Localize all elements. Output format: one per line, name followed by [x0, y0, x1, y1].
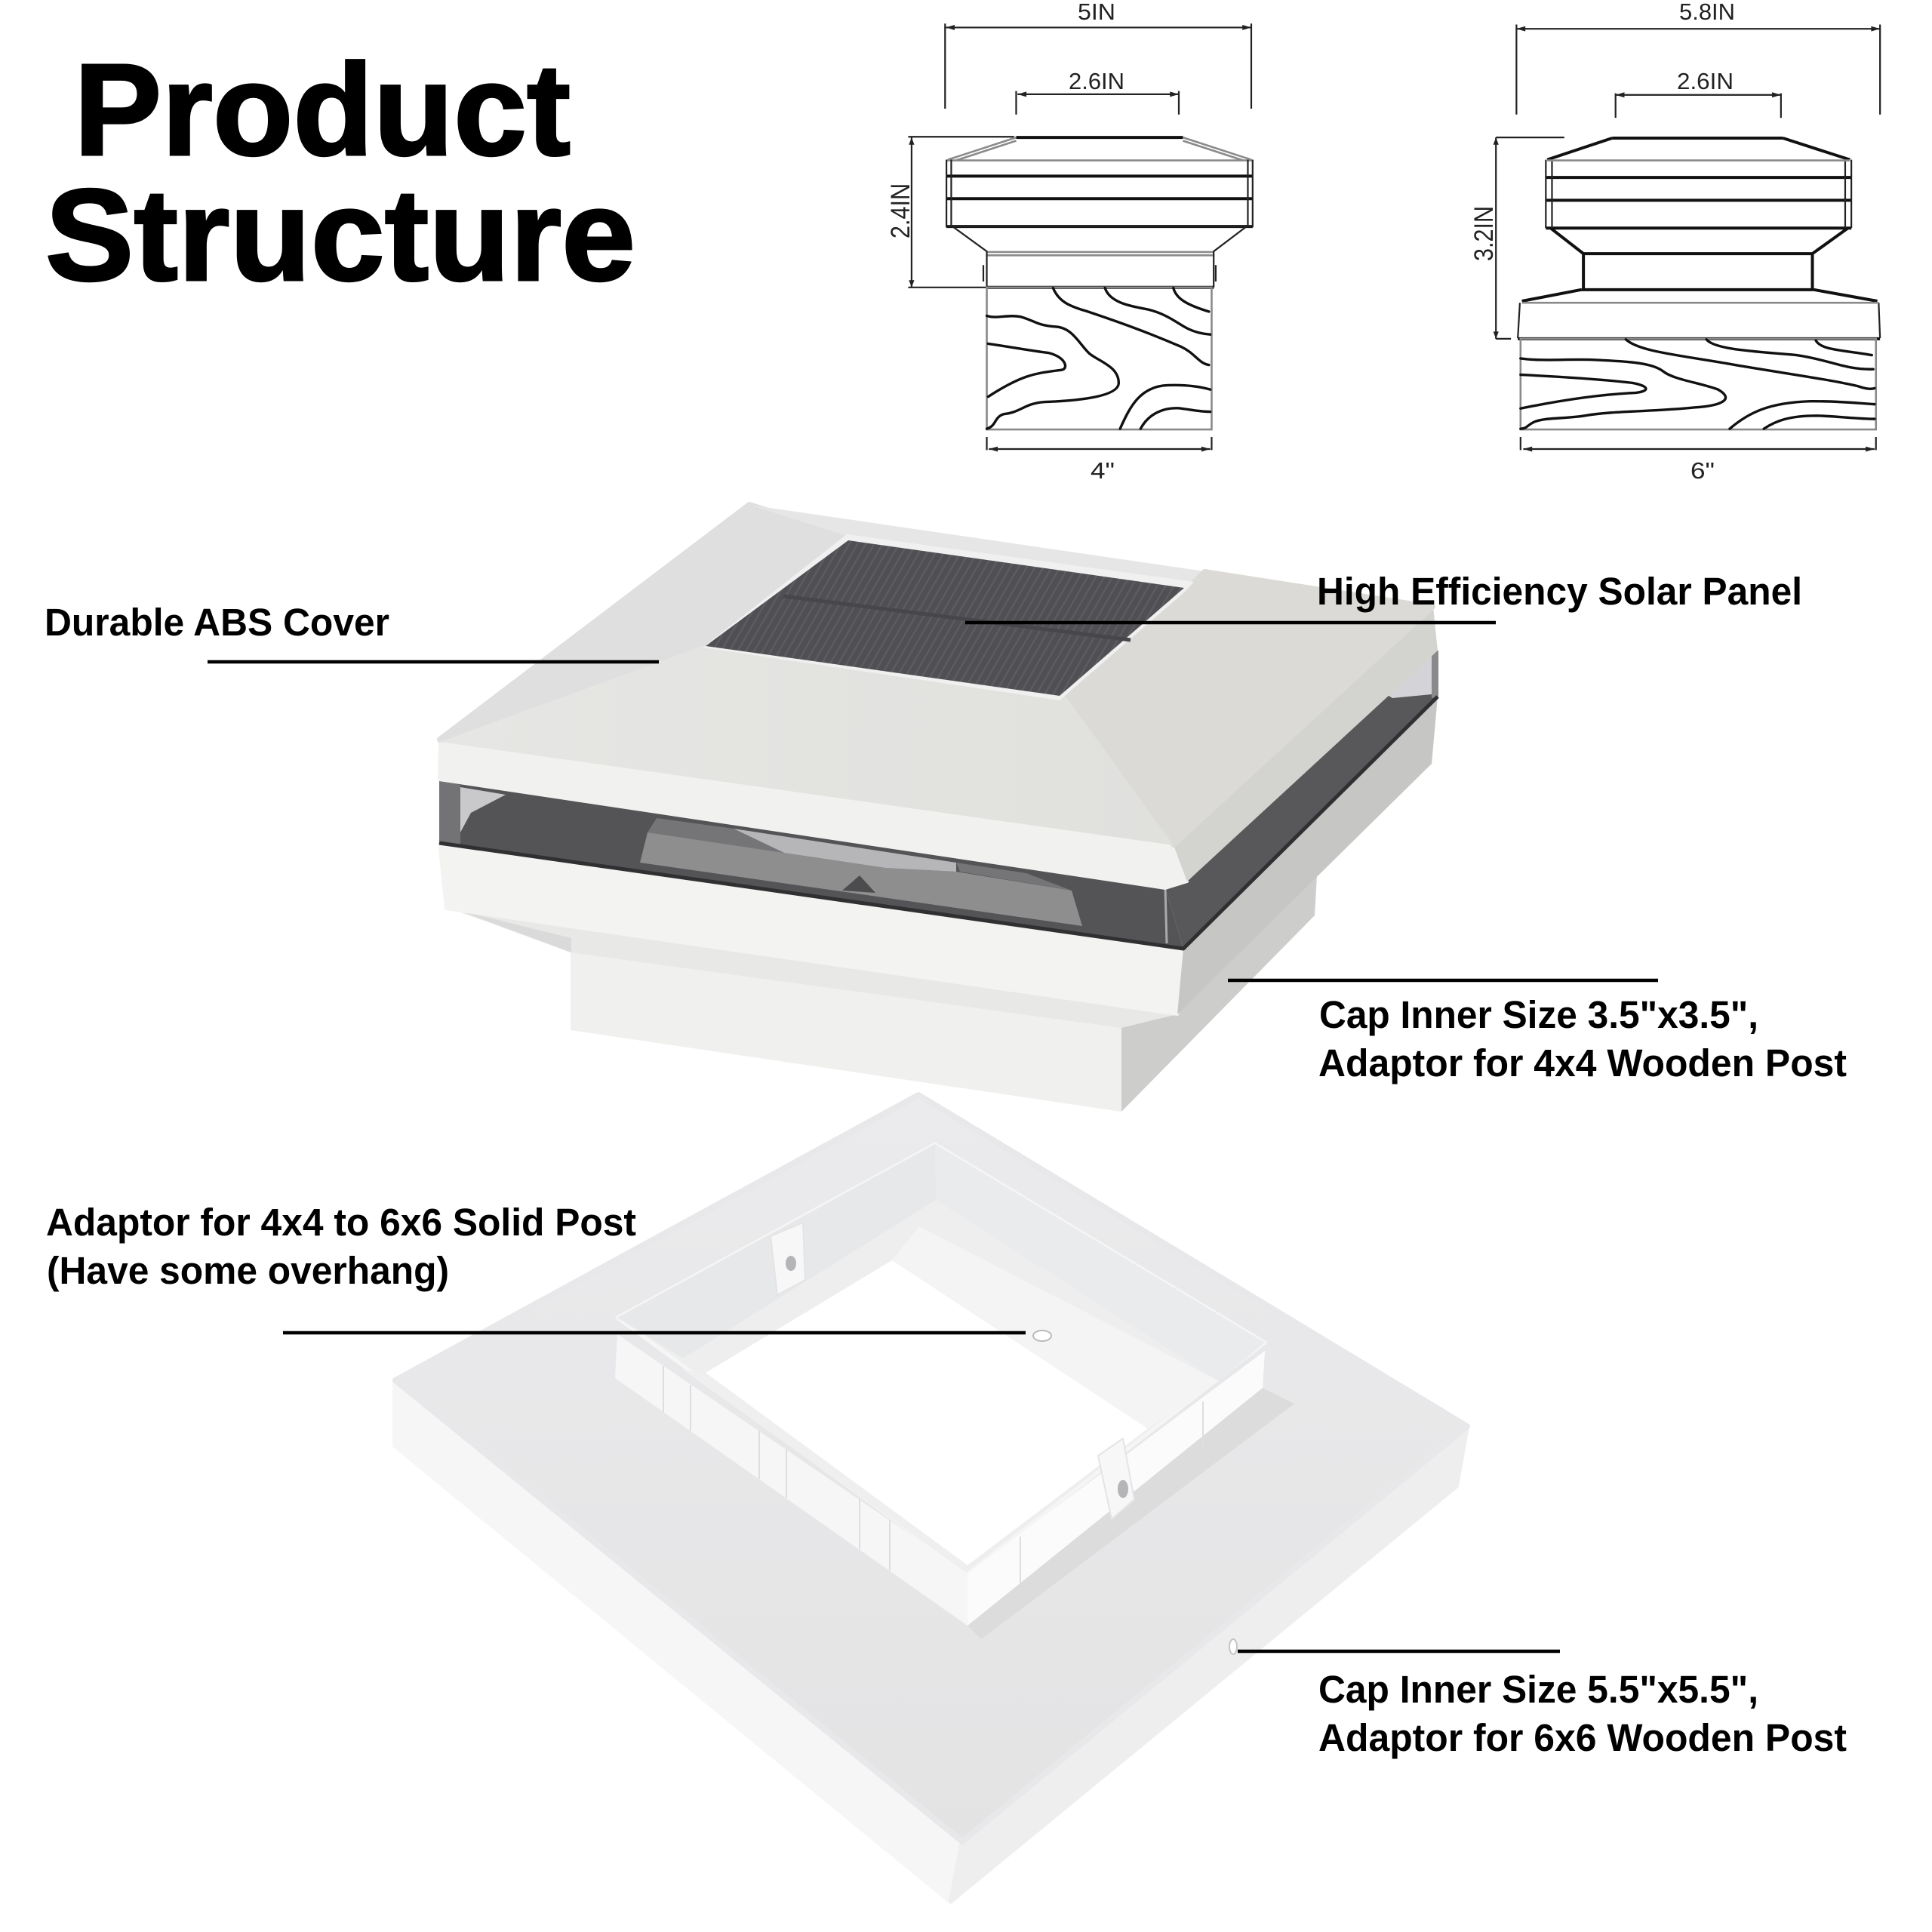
clip tab left	[771, 1223, 805, 1295]
dimension labels: 2.6IN	[1677, 68, 1734, 94]
title	[45, 36, 635, 308]
dimension labels	[886, 0, 1735, 484]
collar front wall	[615, 1334, 968, 1626]
wood post	[1521, 339, 1876, 429]
callout: high efficiency solar panel: High Efficiency Solar Panel	[1317, 570, 1802, 613]
dimension labels: 4"	[1091, 457, 1115, 484]
callout: 6x6 cap inner size	[1238, 1651, 1847, 1759]
arrowheads	[1494, 26, 1880, 452]
panel surround	[703, 534, 1194, 700]
callout: 4x4 to 6x6 adaptor: Adaptor for 4x4 to 6x6 Solid Post	[46, 1201, 636, 1244]
callout: durable ABS cover: Durable ABS Cover	[45, 601, 389, 644]
callout: 6x6 cap inner size: Adaptor for 6x6 Wooden Post	[1318, 1716, 1847, 1759]
collar interior	[617, 1144, 1265, 1574]
callout: 4x4 to 6x6 adaptor	[46, 1201, 1026, 1333]
callout: 4x4 to 6x6 adaptor: (Have some overhang)	[47, 1249, 449, 1292]
adaptor right side	[951, 1426, 1467, 1901]
dimension diagram: 4x4 post	[908, 23, 1253, 452]
photo: 6x6 adaptor	[395, 1095, 1467, 1901]
wood grain	[1521, 340, 1875, 429]
callout: 4x4 cap inner size: Adaptor for 4x4 Wooden Post	[1318, 1041, 1847, 1084]
adaptor top face	[395, 1095, 1467, 1841]
screw hole side	[1229, 1639, 1237, 1654]
arrowheads	[909, 25, 1251, 452]
under slope	[453, 909, 1177, 1028]
dimension diagram: 6x6 post	[1494, 25, 1880, 452]
photo: solar post cap	[439, 505, 1438, 1112]
callout: 6x6 cap inner size: Cap Inner Size 5.5"x5.5",	[1318, 1668, 1758, 1711]
cover slopes	[440, 505, 1433, 845]
cap outline	[946, 137, 1253, 288]
collar right wall	[968, 1351, 1265, 1626]
base sleeve	[571, 875, 1317, 1112]
wood grain	[987, 288, 1211, 429]
cap outline	[1518, 138, 1880, 339]
dimension lines	[908, 23, 1251, 450]
clip tab right	[1098, 1438, 1134, 1519]
dimension labels: 3.2IN	[1469, 206, 1499, 261]
solar panel	[706, 540, 1184, 696]
square opening	[706, 1260, 1148, 1565]
wood post	[987, 288, 1211, 429]
inner wall strip	[683, 1370, 968, 1574]
dimension labels: 6"	[1690, 457, 1715, 484]
glass light band	[439, 651, 1438, 949]
dimension labels: 2.4IN	[886, 183, 915, 238]
cover rim	[439, 607, 1438, 888]
title: Product	[74, 36, 571, 183]
dimension labels: 2.6IN	[1069, 68, 1124, 94]
callout: 4x4 cap inner size: Cap Inner Size 3.5"x3.5",	[1319, 993, 1758, 1036]
dimension lines	[1496, 25, 1880, 450]
lower skirt	[439, 697, 1438, 1014]
title: Structure	[45, 162, 635, 308]
screw hole top	[1033, 1331, 1051, 1341]
adaptor front side	[395, 1380, 962, 1901]
collar shadow	[968, 1388, 1294, 1639]
callout: 4x4 cap inner size	[1228, 980, 1847, 1084]
